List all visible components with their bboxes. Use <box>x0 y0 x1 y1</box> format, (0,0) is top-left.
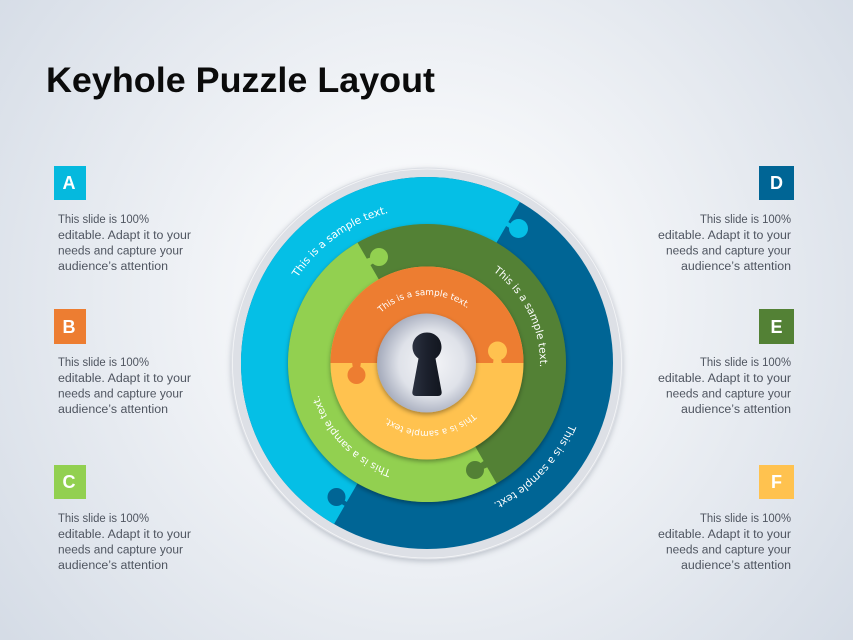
item C: badge and description: C <box>62 472 76 492</box>
item B: badge and description: editable. Adapt it to your <box>58 373 191 385</box>
item D: badge and description: This slide is 100% <box>700 214 791 226</box>
puzzle tab: yellow <box>488 342 507 364</box>
item E: badge and description: E <box>770 317 783 337</box>
item F: badge and description <box>658 465 794 572</box>
item E: badge and description: editable. Adapt it to your <box>658 373 791 385</box>
middle ring: light green segment <box>288 243 496 502</box>
item B: badge and description <box>54 309 191 416</box>
item C: badge and description: This slide is 100% <box>58 513 149 525</box>
item D: badge and description: editable. Adapt it to your <box>658 230 791 242</box>
item E: badge and description: audience’s attention <box>681 404 791 416</box>
item A: badge and description: A <box>62 173 76 193</box>
item C: badge and description: needs and capture your <box>58 544 183 556</box>
item D: badge and description: audience’s attention <box>681 261 791 273</box>
item A: badge and description: This slide is 100% <box>58 214 149 226</box>
puzzle tab: orange <box>348 362 366 384</box>
item C: badge and description: audience’s attention <box>58 560 168 572</box>
keyhole disc <box>377 314 476 412</box>
item F: badge and description: This slide is 100% <box>700 513 791 525</box>
label: orange ring: This is a sample text. <box>376 290 468 312</box>
item F: badge and description: audience’s attention <box>681 560 791 572</box>
item B: badge and description: This slide is 100% <box>58 357 149 369</box>
label: yellow ring: This is a sample text. <box>386 414 478 436</box>
item C: badge and description: editable. Adapt it to your <box>58 529 191 541</box>
item E: badge and description: This slide is 100% <box>700 357 791 369</box>
label: light green ring: This is a sample text. <box>314 396 389 478</box>
middle ring: dark green segment <box>288 224 566 502</box>
label: cyan ring: This is a sample text. <box>291 207 388 276</box>
item B: badge and description: audience’s attention <box>58 404 168 416</box>
item A: badge and description: editable. Adapt it to your <box>58 230 191 242</box>
keyhole puzzle diagram <box>228 166 626 564</box>
title: Keyhole Puzzle Layout <box>46 61 435 100</box>
item E: badge and description: needs and capture your <box>666 388 791 400</box>
puzzle tab: dark blue <box>328 488 351 508</box>
outer ring: cyan segment <box>241 177 520 524</box>
item D: badge and description: D <box>770 173 783 193</box>
item A: badge and description: needs and capture your <box>58 246 183 258</box>
label: dark blue ring: This is a sample text. <box>494 426 576 508</box>
puzzle tab: light green <box>366 248 388 266</box>
label: dark green ring: This is a sample text. <box>495 265 548 366</box>
base plate <box>231 168 623 560</box>
item E: badge and description <box>658 309 794 416</box>
puzzle tab: dark green <box>466 460 488 479</box>
outer ring: dark blue segment <box>241 177 613 549</box>
item A: badge and description <box>54 166 191 273</box>
icon: keyhole <box>412 332 442 396</box>
item B: badge and description: needs and capture your <box>58 388 183 400</box>
item F: badge and description: needs and capture your <box>666 544 791 556</box>
item F: badge and description: F <box>771 472 782 492</box>
item A: badge and description: audience’s attention <box>58 261 168 273</box>
inner ring <box>330 266 524 460</box>
inner ring: orange half <box>330 266 524 363</box>
item B: badge and description: B <box>62 317 76 337</box>
item D: badge and description: needs and capture your <box>666 246 791 258</box>
item F: badge and description: editable. Adapt it to your <box>658 529 791 541</box>
item C: badge and description <box>54 465 191 572</box>
item D: badge and description <box>658 166 794 273</box>
puzzle tab: cyan <box>502 219 528 238</box>
